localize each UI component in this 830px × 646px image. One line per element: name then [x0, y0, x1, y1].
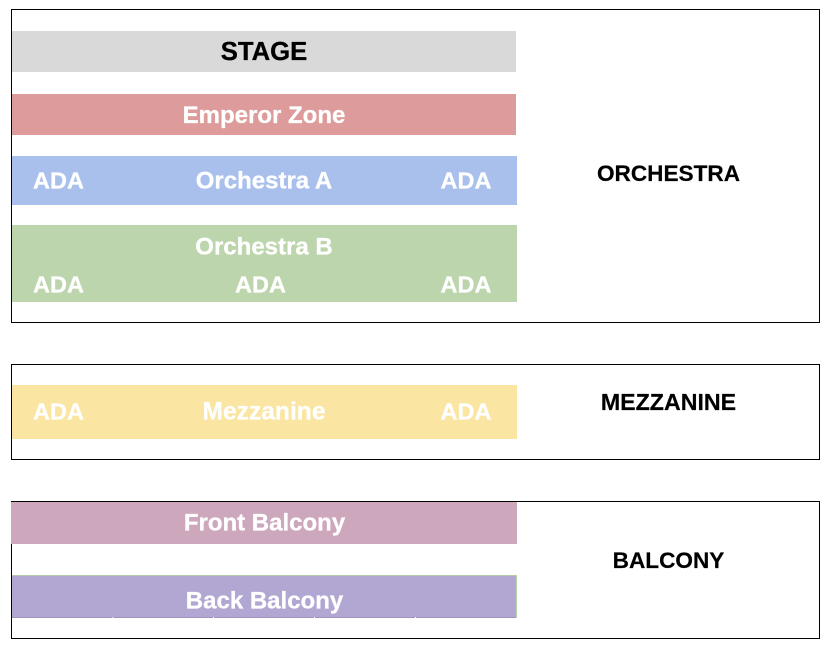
stage [12, 31, 516, 72]
stage: STAGE [221, 38, 307, 66]
section: orchestra a: ADA [441, 168, 491, 194]
section: orchestra b [12, 225, 517, 302]
section: mezzanine: ADA [33, 398, 84, 424]
section: orchestra b: ADA [235, 272, 286, 298]
panel: orchestra [12, 10, 820, 322]
section: orchestra b: Orchestra B [195, 234, 333, 260]
section: emperor zone [12, 94, 516, 135]
section: mezzanine: Mezzanine [202, 398, 326, 426]
section: orchestra a [12, 156, 517, 205]
section: mezzanine: ADA [441, 398, 491, 424]
label: balcony: BALCONY [613, 548, 724, 573]
section: back balcony [12, 575, 517, 618]
section: orchestra a: ADA [33, 168, 84, 194]
label: orchestra: ORCHESTRA [597, 161, 740, 186]
section: front balcony [11, 502, 517, 544]
label: mezzanine: MEZZANINE [601, 389, 736, 415]
section: orchestra b: ADA [441, 272, 491, 298]
section: back balcony: Back Balcony [186, 588, 344, 614]
section: front balcony: Front Balcony [184, 510, 346, 536]
panel: mezzanine [12, 364, 820, 460]
section: emperor zone: Emperor Zone [183, 102, 345, 129]
section: mezzanine [12, 385, 517, 439]
section: orchestra b: ADA [33, 272, 84, 298]
section: orchestra a: Orchestra A [196, 168, 332, 194]
panel: balcony [11, 502, 820, 638]
